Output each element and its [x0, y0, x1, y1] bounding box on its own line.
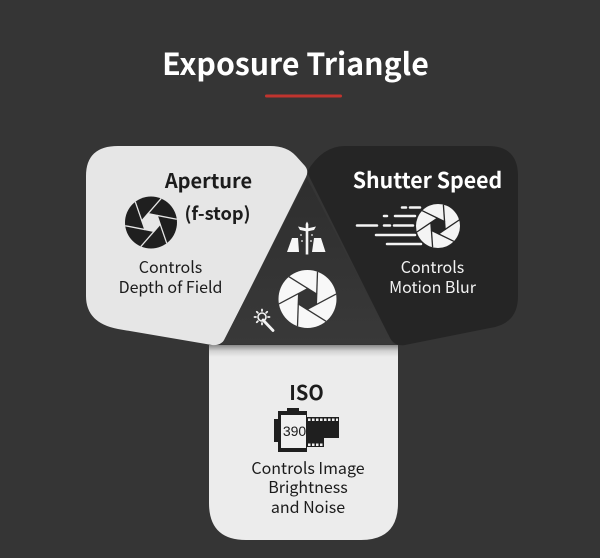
icon: film roll: [274, 408, 339, 452]
Aperture description: Controls: [139, 254, 202, 278]
panel: Shutter Speed: [307, 146, 518, 345]
ISO description: and Noise: [271, 494, 345, 518]
icon: shutter with motion lines: [357, 196, 467, 256]
icon: central aperture: [270, 261, 345, 337]
Aperture heading: Aperture: [164, 165, 252, 194]
title underline: [265, 94, 342, 98]
title: Exposure Triangle: [162, 40, 429, 84]
Shutter Speed description: [389, 254, 477, 298]
Aperture description: [119, 254, 222, 298]
Shutter Speed heading: Shutter Speed: [353, 164, 502, 195]
ISO description: [251, 455, 365, 518]
panel: Aperture: [86, 146, 307, 345]
icon: film roll: 390: [283, 423, 306, 439]
ISO description: Controls Image: [251, 455, 365, 479]
panel: ISO: [209, 345, 398, 540]
Shutter Speed description: Controls: [401, 254, 464, 278]
icon: aperture: [122, 193, 180, 252]
Aperture description: Depth of Field: [119, 274, 222, 298]
ISO description: Brightness: [268, 474, 348, 498]
panel: centre triangle: [222, 178, 393, 344]
Shutter Speed description: Motion Blur: [389, 274, 477, 298]
icon: magic wand: [254, 310, 273, 330]
ISO heading: ISO: [289, 377, 324, 406]
f-stop subheading: (f-stop): [185, 200, 250, 226]
icon: depth of field: [287, 222, 326, 254]
